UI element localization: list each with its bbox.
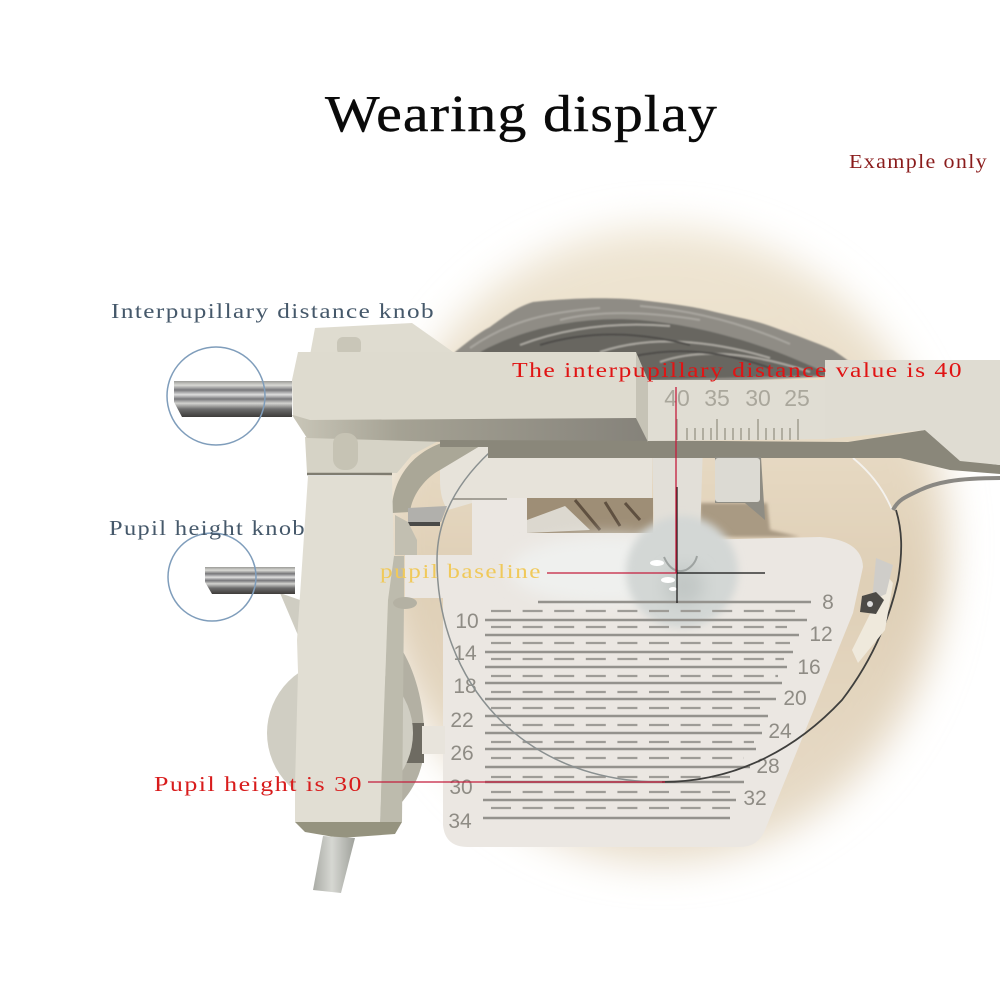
- grip side band: [380, 556, 404, 822]
- label: pupil height knob: Pupil height knob: [109, 516, 306, 540]
- left scale numbers: 34: [448, 810, 472, 833]
- arm left bevel: [292, 415, 648, 442]
- right scale numbers: 24: [768, 720, 792, 743]
- arm right block: [825, 360, 1000, 465]
- example note: Example only: [849, 151, 988, 173]
- connector block: [305, 437, 446, 473]
- marker: pupil height line: [368, 781, 665, 783]
- label: interpupillary distance knob: Interpupillary distance knob: [111, 299, 435, 323]
- grip face: [295, 476, 394, 822]
- side block: [395, 515, 417, 555]
- scale numerals: 40: [664, 385, 690, 411]
- lower knob shaft: [205, 567, 295, 594]
- transparent ruler card: [405, 443, 863, 847]
- connector bump: [333, 433, 358, 470]
- wheel mechanism: [404, 723, 424, 763]
- knob highlight: pupil height: [168, 533, 256, 621]
- curved link: [392, 442, 480, 513]
- marker: vertical interpupillary line: [676, 387, 677, 603]
- pupil plate: [440, 447, 652, 510]
- chrome clip: [408, 506, 447, 526]
- right scale numbers: 28: [756, 755, 780, 778]
- face photo background: [377, 227, 947, 863]
- scale numerals: 25: [784, 385, 810, 411]
- glasses frame right: [662, 510, 901, 782]
- left scale numbers: 18: [453, 675, 477, 698]
- lens tab: [422, 726, 445, 754]
- lens edge upper right: [853, 458, 892, 510]
- grip bottom: [295, 822, 402, 838]
- card body: [405, 498, 863, 847]
- glasses nose pad: [852, 558, 893, 663]
- iris: [626, 516, 738, 628]
- connector shadow line: [307, 473, 392, 475]
- label: interpupillary value: The interpupillary distance value is 40: [512, 358, 963, 382]
- label: pupil baseline: pupil baseline: [380, 561, 542, 583]
- eyebrow: [455, 298, 862, 385]
- arm scale block: [648, 380, 825, 441]
- label: pupil height value: Pupil height is 30: [154, 772, 363, 796]
- upper knob shaft: [174, 381, 292, 417]
- arm left block: [292, 352, 636, 420]
- lens outline left: [437, 452, 662, 782]
- left scale numbers: 22: [450, 709, 474, 732]
- arm step face: [636, 352, 648, 442]
- arm lower band: [440, 430, 1000, 474]
- left scale numbers: 10: [455, 610, 479, 633]
- right scale numbers: 12: [809, 623, 833, 646]
- scale ticks: [677, 419, 798, 440]
- marker: pupil baseline line: [547, 572, 765, 574]
- plate line: [453, 498, 507, 500]
- grip wheel right side: [402, 650, 424, 802]
- right scale numbers: [743, 591, 834, 810]
- grip wheel: [267, 660, 413, 806]
- graduated long lines: [483, 602, 811, 818]
- brow shadow by clip: [700, 503, 800, 537]
- left scale numbers: [448, 610, 479, 833]
- scale numerals: 35: [704, 385, 730, 411]
- scale numerals: 30: [745, 385, 771, 411]
- glasses temple: [893, 478, 1000, 510]
- eye white: [510, 536, 710, 604]
- top nub: [310, 323, 453, 355]
- left scale numbers: 26: [450, 742, 474, 765]
- frame clip: [715, 457, 765, 520]
- lash seen through window: [527, 498, 653, 533]
- right scale numbers: 32: [743, 787, 767, 810]
- measuring device: [174, 323, 1000, 893]
- slider strip: [652, 443, 703, 573]
- scale numerals: [664, 385, 810, 411]
- skin area: [377, 227, 947, 863]
- right scale numbers: 16: [797, 656, 821, 679]
- grip ball: [393, 597, 417, 609]
- right scale numbers: 8: [822, 591, 834, 614]
- right scale numbers: 20: [783, 687, 807, 710]
- knob highlight: interpupillary: [167, 347, 265, 445]
- bracket behind lower knob: [280, 593, 300, 640]
- graduated dashes: [491, 611, 795, 808]
- title: Wearing display: [325, 86, 718, 143]
- cable tube: [313, 836, 355, 893]
- left scale numbers: 14: [453, 642, 477, 665]
- left scale numbers: 30: [449, 776, 473, 799]
